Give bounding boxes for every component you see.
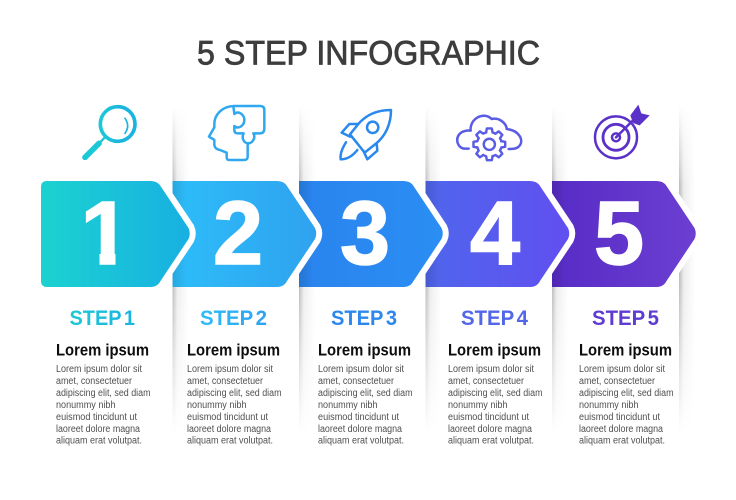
text block 4: Lorem ipsum dolor sit bbox=[448, 364, 534, 375]
text block 1: nonummy nibh bbox=[56, 400, 116, 411]
text block 4: nonummy nibh bbox=[448, 400, 508, 411]
text block 3: laoreet dolore magna bbox=[318, 424, 402, 435]
panel: step 5 bbox=[552, 105, 696, 446]
icon: head with puzzle piece bbox=[209, 106, 264, 160]
text block 1: laoreet dolore magna bbox=[56, 424, 140, 435]
number 5: 5 bbox=[594, 184, 644, 284]
text block 2: aliquam erat volutpat. bbox=[187, 436, 273, 446]
icon: magnifying glass bbox=[85, 107, 135, 157]
panel: step 3 bbox=[299, 110, 443, 447]
text block 4: euismod tincidunt ut bbox=[448, 412, 529, 423]
panel: step 1 bbox=[41, 107, 190, 446]
text block 3: Lorem ipsum dolor sit bbox=[318, 364, 404, 375]
arrow 1 bbox=[41, 175, 190, 293]
icon: cloud with gear bbox=[457, 116, 521, 160]
text block 4: amet, consectetuer bbox=[448, 376, 525, 387]
title: 5 STEP INFOGRAPHIC bbox=[197, 34, 540, 72]
heading 4: Lorem ipsum bbox=[448, 342, 541, 360]
text block 3: euismod tincidunt ut bbox=[318, 412, 399, 423]
text block 2 bbox=[187, 364, 282, 446]
step label 4: STEP 4 bbox=[461, 306, 528, 330]
text block 5 bbox=[579, 364, 674, 446]
text block 4: aliquam erat volutpat. bbox=[448, 436, 534, 446]
text block 5: euismod tincidunt ut bbox=[579, 412, 660, 423]
text block 4: adipiscing elit, sed diam bbox=[448, 388, 542, 399]
text block 1: euismod tincidunt ut bbox=[56, 412, 137, 423]
text block 5: Lorem ipsum dolor sit bbox=[579, 364, 665, 375]
step label 5: STEP 5 bbox=[592, 306, 659, 330]
text block 5: nonummy nibh bbox=[579, 400, 638, 411]
arrow 4 bbox=[426, 175, 569, 293]
text block 1: amet, consectetuer bbox=[56, 376, 133, 387]
icon: target bbox=[595, 105, 650, 158]
text block 3: adipiscing elit, sed diam bbox=[318, 388, 412, 399]
number 1: 1 bbox=[80, 184, 131, 284]
text block 1: aliquam erat volutpat. bbox=[56, 436, 142, 446]
text block 5: aliquam erat volutpat. bbox=[579, 436, 665, 446]
step label 1: STEP 1 bbox=[70, 306, 135, 330]
step label 3: STEP 3 bbox=[331, 306, 397, 330]
text block 2: laoreet dolore magna bbox=[187, 424, 271, 435]
text block 2: amet, consectetuer bbox=[187, 376, 264, 387]
text block 5: laoreet dolore magna bbox=[579, 424, 663, 435]
panel: step 4 bbox=[426, 116, 569, 447]
panel: step 2 bbox=[172, 106, 316, 447]
text block 2: Lorem ipsum dolor sit bbox=[187, 364, 273, 375]
text block 5: amet, consectetuer bbox=[579, 376, 656, 387]
text block 3: aliquam erat volutpat. bbox=[318, 436, 404, 446]
text block 1 bbox=[56, 364, 150, 446]
arrow 3 bbox=[299, 175, 443, 293]
icon: rocket bbox=[341, 110, 391, 159]
text block 3: amet, consectetuer bbox=[318, 376, 395, 387]
text block 1: adipiscing elit, sed diam bbox=[56, 388, 150, 399]
text block 5: adipiscing elit, sed diam bbox=[579, 388, 674, 399]
heading 2: Lorem ipsum bbox=[187, 342, 280, 360]
text block 3: nonummy nibh bbox=[318, 400, 378, 411]
heading 1: Lorem ipsum bbox=[56, 342, 149, 360]
number 3: 3 bbox=[340, 184, 390, 284]
text block 4 bbox=[448, 364, 542, 446]
heading 5: Lorem ipsum bbox=[579, 342, 672, 360]
text block 2: adipiscing elit, sed diam bbox=[187, 388, 282, 399]
text block 4: laoreet dolore magna bbox=[448, 424, 532, 435]
step label 2: STEP 2 bbox=[200, 306, 267, 330]
text block 2: nonummy nibh bbox=[187, 400, 246, 411]
text block 3 bbox=[318, 364, 412, 446]
text block 2: euismod tincidunt ut bbox=[187, 412, 268, 423]
number 4: 4 bbox=[470, 184, 520, 284]
arrow 5 bbox=[552, 181, 696, 287]
heading 3: Lorem ipsum bbox=[318, 342, 411, 360]
number 2: 2 bbox=[213, 184, 263, 284]
text block 1: Lorem ipsum dolor sit bbox=[56, 364, 142, 375]
arrow 2 bbox=[172, 175, 316, 293]
